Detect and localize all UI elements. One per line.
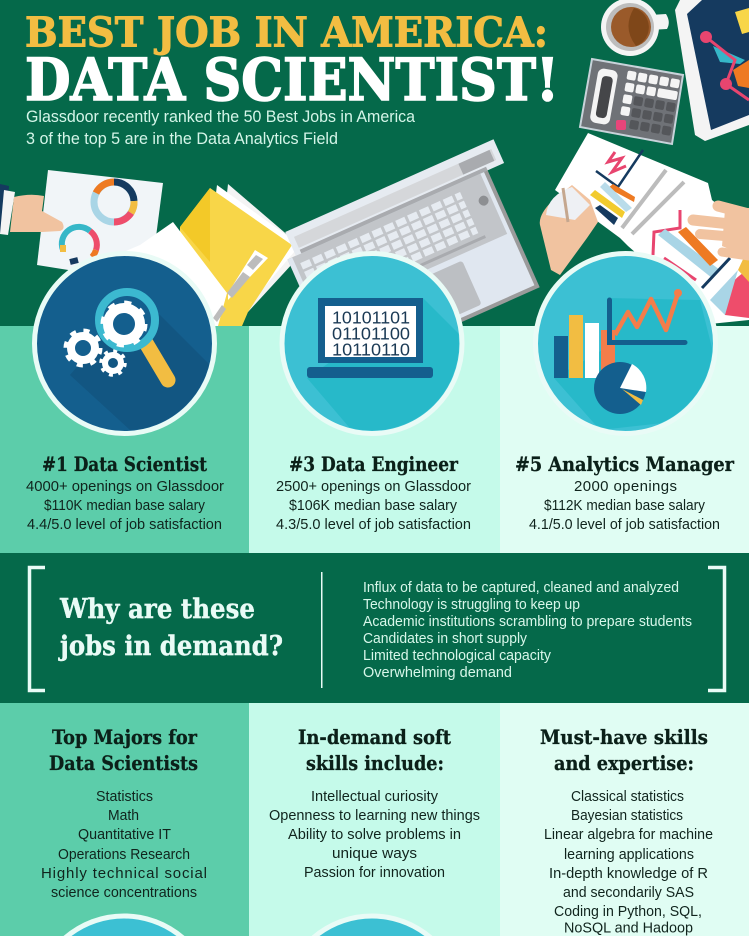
panel: must-have skills: and expertise: bbox=[554, 751, 694, 775]
icon: laptop binary: 10110110 bbox=[332, 340, 410, 360]
job card: data scientist: #1 Data Scientist bbox=[42, 452, 208, 476]
panel: must-have skills: Coding in Python, SQL, bbox=[554, 903, 702, 920]
illustration: yellow folder and papers bbox=[126, 184, 302, 326]
job card: data engineer bbox=[276, 452, 471, 533]
panel: must-have skills: Must-have skills bbox=[540, 725, 708, 749]
column backgrounds bbox=[0, 326, 749, 553]
icon: bar, line and pie charts bbox=[536, 254, 716, 434]
icon: laptop binary: 10101101 bbox=[332, 308, 410, 328]
panel: must-have skills: and secondarily SAS bbox=[563, 884, 694, 901]
icon: magnifier and gears bbox=[34, 254, 215, 434]
panel: top majors: Quantitative IT bbox=[78, 826, 171, 843]
panel: top majors: Statistics bbox=[96, 788, 153, 805]
icon: cropped circle centre bbox=[312, 913, 432, 936]
lower column backgrounds bbox=[0, 703, 749, 936]
panel: why in demand bbox=[0, 553, 749, 703]
panel: soft skills bbox=[269, 725, 480, 881]
panel: soft skills: Openness to learning new things bbox=[269, 807, 480, 824]
job card: data engineer: #3 Data Engineer bbox=[289, 452, 458, 476]
panel: must-have skills: NoSQL and Hadoop bbox=[564, 920, 693, 936]
panel: top majors: Top Majors for bbox=[52, 725, 197, 749]
panel: soft skills: unique ways bbox=[332, 845, 417, 862]
panel: top majors: Highly technical social bbox=[41, 865, 207, 882]
panel: why in demand: Why are these bbox=[59, 594, 255, 625]
subtitle: 3 of the top 5 are in the Data Analytics Field bbox=[26, 129, 338, 148]
job card: data scientist: $110K median base salary bbox=[44, 497, 205, 514]
illustration: coffee cup bbox=[601, 0, 669, 56]
job card: data engineer: 2500+ openings on Glassdoor bbox=[276, 478, 471, 495]
illustration: laptop bbox=[285, 139, 540, 322]
icon: laptop binary: 01101100 bbox=[332, 324, 410, 344]
subtitle: Glassdoor recently ranked the 50 Best Jobs in America bbox=[26, 107, 415, 126]
job card: data engineer: $106K median base salary bbox=[289, 497, 457, 514]
panel: soft skills: Ability to solve problems in bbox=[288, 826, 461, 843]
subtitle bbox=[26, 107, 415, 148]
panel: why in demand: Candidates in short supply bbox=[363, 630, 527, 647]
panel: why in demand: Limited technological capacity bbox=[363, 647, 551, 664]
panel: soft skills: In-demand soft bbox=[298, 725, 452, 749]
panel: why in demand: jobs in demand? bbox=[58, 631, 283, 662]
panel: must-have skills: Classical statistics bbox=[571, 788, 684, 805]
panel: top majors: science concentrations bbox=[51, 884, 197, 901]
job card: analytics manager bbox=[515, 452, 734, 533]
panel: why in demand: Academic institutions scrambling to prepare students bbox=[363, 613, 692, 630]
panel: top majors bbox=[41, 725, 207, 901]
job card: analytics manager: $112K median base salary bbox=[544, 497, 705, 514]
job card: analytics manager: 2000 openings bbox=[574, 478, 677, 495]
panel: must-have skills: Bayesian statistics bbox=[571, 807, 683, 824]
panel: soft skills: Intellectual curiosity bbox=[311, 788, 438, 805]
panel: top majors: Data Scientists bbox=[49, 751, 198, 775]
illustration: calculator bbox=[580, 59, 683, 144]
job card: data scientist: 4.4/5.0 level of job satisfaction bbox=[27, 516, 222, 533]
job card: data scientist: 4000+ openings on Glassdoor bbox=[26, 478, 224, 495]
job card: data scientist bbox=[26, 452, 224, 533]
job card: analytics manager: 4.1/5.0 level of job satisfaction bbox=[529, 516, 720, 533]
panel: why in demand: Technology is struggling to keep up bbox=[363, 596, 580, 613]
illustration: hand with chart paper bbox=[0, 170, 163, 270]
panel: must-have skills: Linear algebra for machine bbox=[544, 826, 713, 843]
panel: why in demand: Overwhelming demand bbox=[363, 664, 512, 681]
panel: soft skills: skills include: bbox=[306, 751, 444, 775]
illustration: charts paper and hands bbox=[540, 133, 749, 326]
job card: data engineer: 4.3/5.0 level of job satisfaction bbox=[276, 516, 471, 533]
panel: top majors: Operations Research bbox=[58, 846, 190, 863]
panel: must-have skills bbox=[540, 725, 713, 936]
panel: why in demand: Influx of data to be captured, cleaned and analyzed bbox=[363, 579, 679, 596]
illustration: tablet bbox=[675, 0, 749, 141]
header background bbox=[0, 0, 749, 326]
icon: cropped circle left bbox=[64, 913, 184, 936]
panel: must-have skills: In-depth knowledge of R bbox=[549, 865, 708, 882]
panel: top majors: Math bbox=[108, 807, 139, 824]
panel: soft skills: Passion for innovation bbox=[304, 864, 445, 881]
title line one: BEST JOB IN AMERICA: bbox=[25, 8, 548, 56]
panel: must-have skills: learning applications bbox=[564, 846, 694, 863]
icon: laptop binary bbox=[282, 254, 470, 440]
title line two: DATA SCIENTIST! bbox=[25, 46, 559, 114]
